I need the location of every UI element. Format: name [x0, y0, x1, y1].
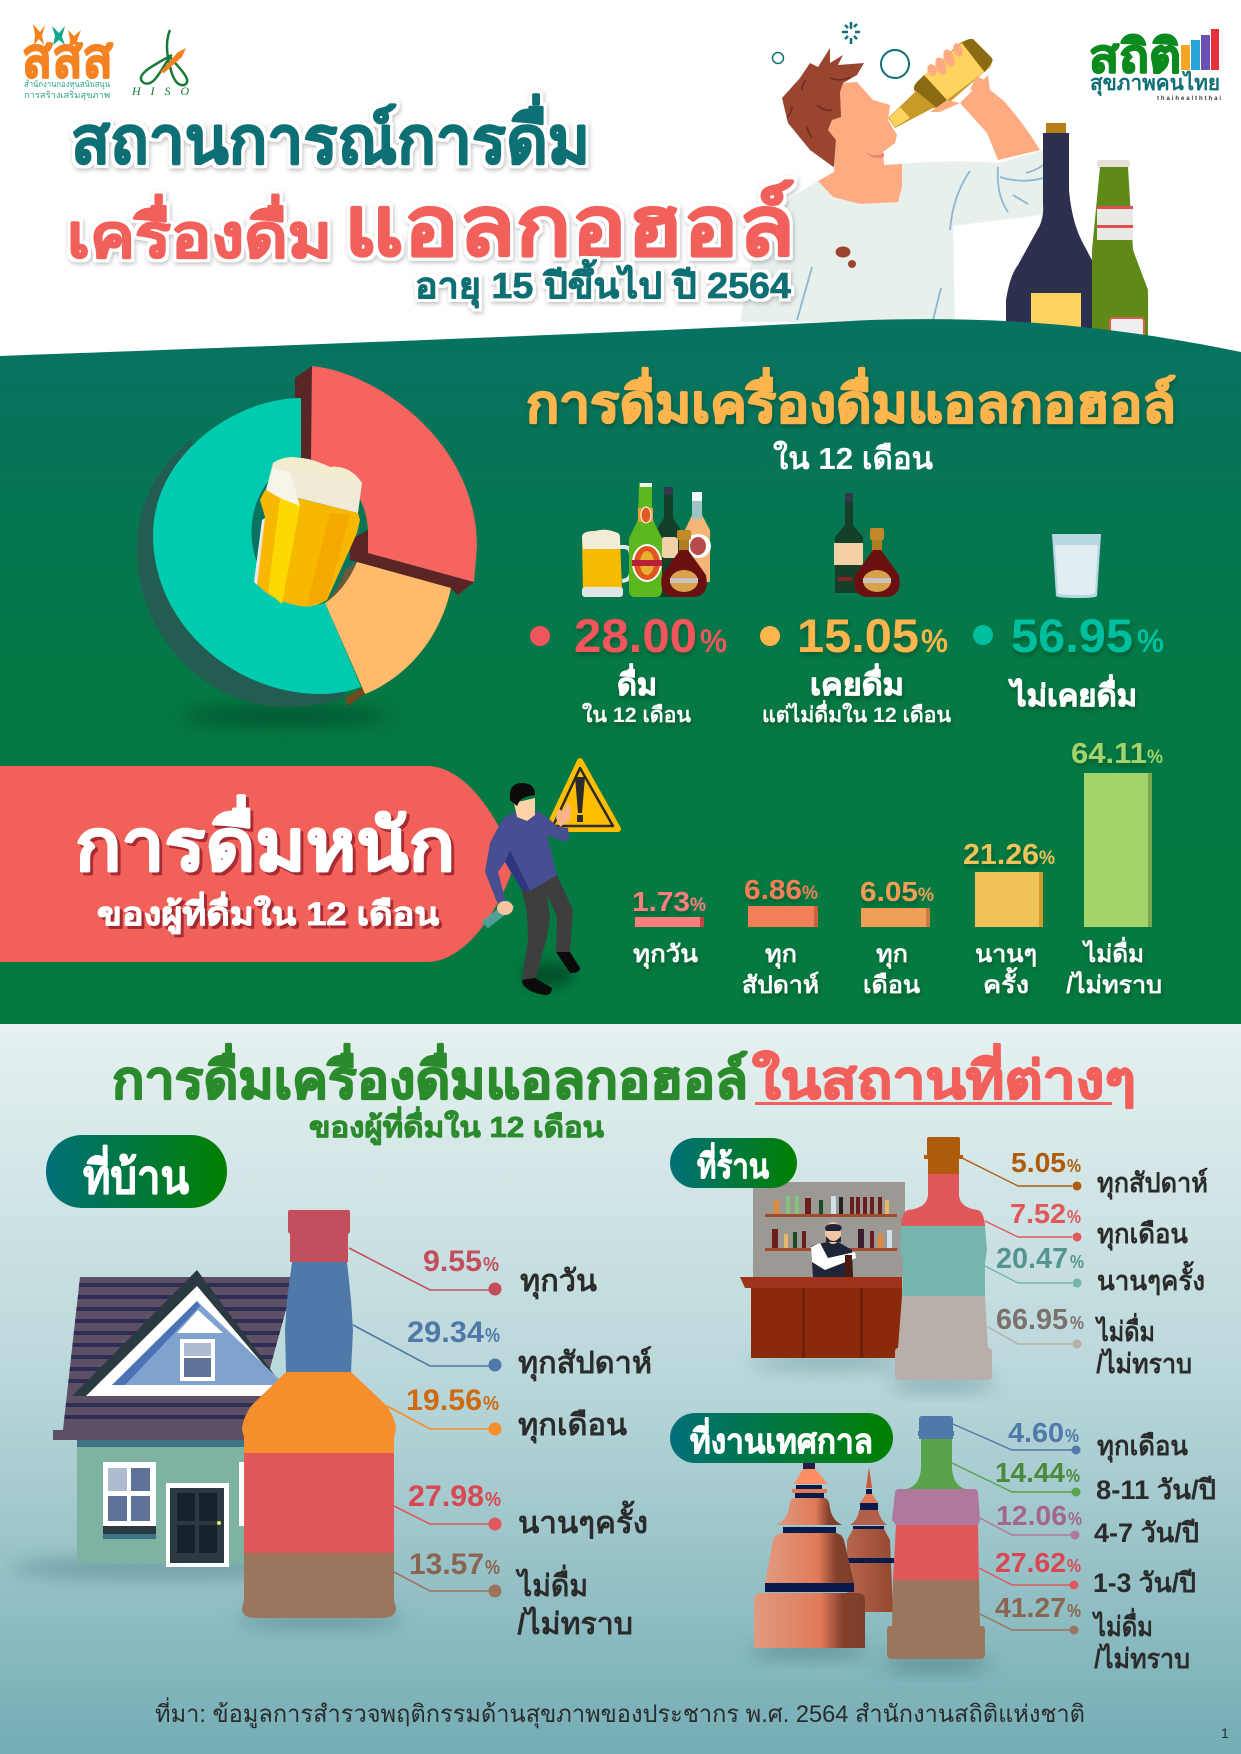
title: สถานการณ์การดื่ม	[71, 93, 590, 177]
callout: daily 9.55: ทุกวัน	[520, 1265, 597, 1300]
callout: none or unknown 66.95: ไม่ดื่ม	[1094, 1312, 1155, 1347]
bar: weekly: %	[802, 883, 818, 904]
callout: 8-11 days 14.44: %	[1066, 1466, 1080, 1486]
callout: 1-3 days 27.62: %	[1067, 1556, 1081, 1576]
heading: drinking in various places: การดื่มเครื่องดื่มแอลกอฮอล์	[112, 1044, 748, 1110]
stat: former drinker 15.05: แต่ไม่ดื่มใน 12 เดือน	[762, 699, 952, 727]
bar: monthly: %	[918, 885, 934, 906]
bar: none or unknown: ไม่ดื่ม	[1081, 936, 1144, 968]
bar: occasionally	[963, 839, 1055, 999]
bar: occasionally: %	[1039, 848, 1055, 869]
heading: drinking in 12 months	[526, 368, 1176, 476]
callout: monthly 19.56: %	[483, 1393, 499, 1415]
callout: none or unknown 13.57: %	[485, 1557, 500, 1579]
donut chart	[137, 366, 477, 725]
bar chart: heavy drinking frequency	[632, 738, 1163, 999]
callout: weekly 29.34: %	[485, 1325, 500, 1347]
heading: drinking in various places	[112, 1044, 1136, 1145]
bottle chart: at home	[235, 1210, 652, 1641]
callout: weekly 5.05	[960, 1147, 1208, 1200]
bar: daily: ทุกวัน	[633, 941, 699, 970]
bar: daily: %	[690, 895, 706, 916]
logo: thai health statistics	[1089, 29, 1221, 102]
callout: occasionally 27.98	[394, 1480, 648, 1540]
title: อายุ 15 ปีขึ้นไป ปี 2564	[415, 259, 791, 309]
illustration: drunk person	[483, 783, 580, 995]
callout: 1-3 days 27.62: 1-3 วัน/ปี	[1093, 1568, 1196, 1598]
callout: monthly 19.56	[387, 1384, 628, 1444]
callout: none or unknown 41.27	[980, 1592, 1190, 1674]
callout: 4-7 days 12.06: %	[1068, 1509, 1082, 1529]
heading: drinking in 12 months: การดื่มเครื่องดื่มแอลกอฮอล์	[526, 368, 1176, 434]
callout: occasionally 20.47	[985, 1243, 1205, 1296]
callout: weekly 29.34: ทุกสัปดาห์	[518, 1346, 652, 1382]
bar: none or unknown: %	[1147, 747, 1163, 768]
green section	[0, 319, 1241, 1024]
icon: warning triangle	[548, 761, 618, 829]
callout: none or unknown 66.95: /ไม่ทราบ	[1096, 1348, 1192, 1379]
bar: weekly: ทุก	[765, 941, 797, 970]
illustration: bar and bartender	[740, 1182, 910, 1369]
icon: former drinker bottles	[834, 493, 900, 597]
callout: monthly 7.52: 7.52	[1010, 1198, 1066, 1229]
logo: thaihealth: การสร้างเสริมสุขภาพ	[24, 90, 110, 101]
bar: weekly	[742, 874, 819, 999]
pill: at bar	[670, 1138, 797, 1188]
bar: monthly: เดือน	[863, 972, 921, 999]
bar: none or unknown	[1066, 738, 1163, 999]
hair	[782, 48, 864, 167]
illustration: dark bottle	[1006, 123, 1107, 345]
bar: monthly	[860, 876, 934, 999]
heading: drinking in 12 months: ใน 12 เดือน	[773, 440, 933, 476]
large stupa	[754, 1463, 865, 1648]
bar: daily: 1.73	[632, 886, 690, 917]
stat: former drinker 15.05	[760, 609, 952, 727]
bartender	[811, 1222, 856, 1277]
pill: at festival: ที่งานเทศกาล	[690, 1417, 873, 1461]
heading: drinking in various places: ของผู้ที่ดื่มใน 12 เดือน	[309, 1106, 604, 1145]
face and neck	[818, 82, 902, 204]
arm	[930, 75, 1040, 160]
stat: former drinker 15.05: %	[921, 623, 948, 659]
callout: weekly 29.34: 29.34	[407, 1316, 484, 1349]
panel: heavy drinking banner: การดื่มหนัก	[75, 794, 455, 886]
callout: occasionally 20.47: 20.47	[996, 1243, 1068, 1275]
callout: none or unknown 41.27: %	[1067, 1601, 1081, 1621]
callout: 1-3 days 27.62: 27.62	[995, 1547, 1066, 1578]
logo: HISO	[131, 30, 189, 98]
callout: monthly 19.56: ทุกเดือน	[518, 1409, 628, 1444]
green bottle	[629, 483, 662, 597]
bar: occasionally: 21.26	[963, 839, 1039, 871]
callout: 8-11 days 14.44: 14.44	[995, 1457, 1065, 1488]
shirt	[740, 150, 1061, 322]
cognac bottle	[677, 530, 691, 540]
pill: at home	[46, 1135, 227, 1208]
logo: HISO: HISO	[131, 84, 189, 98]
illustration: house	[10, 1270, 310, 1578]
callout: 4-7 days 12.06: 4-7 วัน/ปี	[1094, 1518, 1199, 1548]
callout: daily 9.55: %	[483, 1254, 499, 1276]
logo: thaihealth: สสส	[22, 26, 114, 89]
callout: monthly 4.60: 4.60	[1008, 1417, 1064, 1448]
stat: drank 28.00: 28.00	[574, 609, 697, 662]
callout: daily 9.55: 9.55	[423, 1245, 482, 1278]
bar: weekly: 6.86	[744, 874, 802, 905]
bar: none or unknown: /ไม่ทราบ	[1066, 970, 1162, 999]
stat: former drinker 15.05: เคยดื่ม	[810, 663, 904, 702]
source note: ที่มา: ข้อมูลการสำรวจพฤติกรรมด้านสุขภาพของประชากร พ.ศ. 2564 สำนักงานสถิติแห่งชาติ	[155, 1697, 1085, 1729]
callout: monthly 4.60	[953, 1417, 1189, 1463]
stat: never drank 56.95: ไม่เคยดื่ม	[1008, 674, 1137, 713]
callout: none or unknown 41.27: /ไม่ทราบ	[1094, 1643, 1190, 1674]
callout: occasionally 27.98: 27.98	[408, 1480, 484, 1513]
callout: weekly 5.05: %	[1067, 1156, 1081, 1176]
title: เครื่องดื่ม	[67, 194, 332, 270]
callout: occasionally 20.47: %	[1070, 1252, 1084, 1272]
icon: beer glass	[254, 457, 362, 607]
callout: monthly 7.52: %	[1067, 1207, 1081, 1227]
callout: monthly 4.60: %	[1065, 1426, 1079, 1446]
callout: monthly 7.52: ทุกเดือน	[1097, 1219, 1189, 1251]
small stupa	[847, 1467, 894, 1612]
bar: daily	[632, 886, 706, 970]
callout: none or unknown 13.57: /ไม่ทราบ	[517, 1606, 633, 1641]
pill: at festival	[670, 1413, 893, 1463]
illustration: man drinking	[740, 22, 1061, 322]
logo: thai health statistics: thaihealththai	[1157, 96, 1221, 102]
beer bottle	[888, 40, 992, 128]
page number: 1	[1221, 1725, 1229, 1741]
stat: former drinker 15.05: 15.05	[797, 609, 919, 662]
bottle chart: at bar	[887, 1137, 1208, 1390]
callout: none or unknown 13.57: 13.57	[409, 1548, 484, 1581]
callout: monthly 7.52	[985, 1198, 1189, 1251]
title: แอลกอฮอล์	[344, 179, 795, 273]
callout: none or unknown 66.95: %	[1070, 1313, 1084, 1333]
bar: weekly: สัปดาห์	[742, 971, 819, 999]
callout: none or unknown 41.27: 41.27	[995, 1592, 1066, 1623]
callout: 8-11 days 14.44	[952, 1457, 1216, 1505]
bottle chart: at festival	[881, 1416, 1216, 1674]
illustration: green bottle	[1092, 160, 1148, 345]
callout: daily 9.55	[349, 1245, 597, 1300]
callout: none or unknown 66.95	[988, 1304, 1192, 1379]
callout: 4-7 days 12.06	[980, 1500, 1199, 1548]
logo: thai health statistics: สถิติ	[1089, 30, 1181, 82]
stat: drank 28.00: ดื่ม	[617, 663, 657, 702]
slice: former drinker orange	[325, 562, 451, 694]
callout: 8-11 days 14.44: 8-11 วัน/ปี	[1096, 1475, 1216, 1505]
bar: monthly: 6.05	[860, 876, 918, 907]
callout: monthly 4.60: ทุกเดือน	[1097, 1431, 1189, 1463]
callout: monthly 19.56: 19.56	[406, 1384, 482, 1417]
slice: drank red	[311, 366, 477, 582]
bar: occasionally: นานๆ	[975, 941, 1037, 968]
illustration: stupas	[750, 1463, 894, 1656]
clear bottle	[685, 492, 710, 582]
bar: none or unknown: 64.11	[1071, 738, 1147, 770]
callout: 1-3 days 27.62	[979, 1547, 1196, 1598]
slice: never drank teal	[153, 398, 361, 694]
icon: mixed alcohol bottles	[582, 483, 711, 597]
heading: drinking in various places: ในสถานที่ต่างๆ	[752, 1044, 1136, 1110]
icon: water glass	[1052, 534, 1101, 598]
callout: 4-7 days 12.06: 12.06	[996, 1500, 1067, 1531]
callout: weekly 29.34	[353, 1316, 652, 1382]
stat: drank 28.00: %	[700, 623, 727, 659]
callout: none or unknown 13.57: ไม่ดื่ม	[515, 1564, 588, 1603]
callout: weekly 5.05: 5.05	[1011, 1147, 1066, 1178]
panel: heavy drinking banner: ของผู้ที่ดื่มใน 12 เดือน	[97, 891, 439, 935]
stat: never drank 56.95: %	[1137, 623, 1164, 659]
callout: occasionally 27.98: นานๆครั้ง	[518, 1500, 648, 1540]
logo: thaihealth: สำนักงานกองทุนสนับสนุน	[24, 79, 110, 90]
stat: drank 28.00	[530, 609, 727, 727]
callout: none or unknown 66.95: 66.95	[996, 1304, 1068, 1336]
callout: occasionally 27.98: %	[485, 1489, 501, 1511]
callout: occasionally 20.47: นานๆครั้ง	[1097, 1260, 1205, 1296]
stat: never drank 56.95: 56.95	[1011, 609, 1133, 662]
logo: thai health statistics: สุขภาพคนไทย	[1090, 70, 1220, 97]
title	[67, 93, 795, 309]
callout: none or unknown 13.57	[394, 1548, 633, 1641]
pill: at home: ที่บ้าน	[83, 1145, 190, 1203]
bar: occasionally: ครั้ง	[983, 966, 1029, 999]
stat: drank 28.00: ใน 12 เดือน	[582, 702, 692, 727]
dark bottle	[655, 487, 682, 597]
panel: heavy drinking banner	[0, 766, 514, 962]
callout: none or unknown 41.27: ไม่ดื่ม	[1091, 1607, 1153, 1642]
pill: at bar: ที่ร้าน	[697, 1142, 769, 1186]
beer mug	[582, 530, 622, 596]
stat: never drank 56.95	[973, 609, 1164, 713]
callout: weekly 5.05: ทุกสัปดาห์	[1097, 1167, 1208, 1200]
bar: monthly: ทุก	[876, 941, 908, 970]
